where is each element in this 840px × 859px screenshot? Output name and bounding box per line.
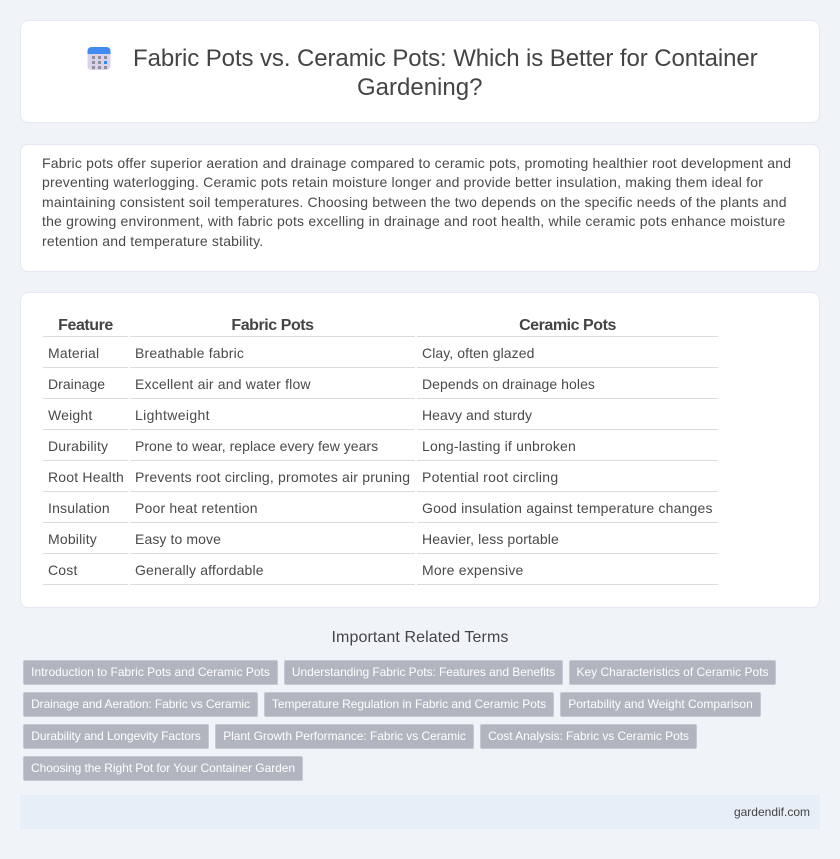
comparison table: Root Health (48, 469, 124, 485)
related terms tags (23, 660, 776, 781)
comparison table: Generally affordable (135, 562, 264, 578)
comparison table: Insulation (48, 500, 110, 516)
comparison table: Long-lasting if unbroken (422, 438, 576, 454)
footer credit: gardendif.com (734, 805, 810, 819)
comparison table: Easy to move (135, 531, 221, 547)
related terms tags: Understanding Fabric Pots: Features and Benefits (292, 665, 555, 679)
related terms tags: Choosing the Right Pot for Your Container Garden (31, 761, 295, 775)
related terms tags: Drainage and Aeration: Fabric vs Ceramic (31, 697, 250, 711)
footer bar (20, 795, 820, 829)
title: Gardening? (357, 74, 482, 101)
related terms tags: Key Characteristics of Ceramic Pots (576, 665, 769, 679)
comparison table: Good insulation against temperature changes (422, 500, 713, 516)
comparison table: Excellent air and water flow (135, 376, 311, 392)
comparison table: Ceramic Pots (519, 317, 616, 334)
related terms tags: Introduction to Fabric Pots and Ceramic Pots (31, 665, 270, 679)
comparison table: Prevents root circling, promotes air pruning (135, 469, 410, 485)
comparison table: Heavy and sturdy (422, 407, 532, 423)
related terms tags: Temperature Regulation in Fabric and Ceramic Pots (272, 697, 546, 711)
header card (20, 20, 820, 123)
intro text: retention and temperature stability. (42, 233, 263, 249)
intro text (42, 154, 791, 249)
comparison table: Durability (48, 438, 108, 454)
intro text: the growing environment, with fabric pots excelling in drainage and root health, while ceramic pots enhance moisture (42, 213, 785, 229)
comparison table: Material (48, 345, 99, 361)
comparison table: More expensive (422, 562, 524, 578)
comparison table: Heavier, less portable (422, 531, 559, 547)
comparison table: Fabric Pots (231, 317, 314, 334)
related terms tags: Durability and Longevity Factors (31, 729, 201, 743)
related terms tags: Plant Growth Performance: Fabric vs Ceramic (223, 729, 466, 743)
comparison table: Weight (48, 407, 92, 423)
related terms tags: Cost Analysis: Fabric vs Ceramic Pots (488, 729, 689, 743)
intro text: Fabric pots offer superior aeration and drainage compared to ceramic pots, promoting healthier root development and (42, 154, 791, 170)
comparison table: Depends on drainage holes (422, 376, 595, 392)
comparison table: Prone to wear, replace every few years (135, 438, 378, 454)
title (133, 45, 758, 101)
related terms heading: Important Related Terms (332, 629, 508, 646)
icon: calendar (88, 47, 110, 70)
related terms tags: Portability and Weight Comparison (568, 697, 753, 711)
title: Fabric Pots vs. Ceramic Pots: Which is Better for Container (133, 45, 758, 72)
intro text: maintaining consistent soil temperatures. Choosing between the two depends on the specific needs of the plants and (42, 194, 787, 210)
comparison table: Feature (58, 317, 113, 334)
comparison table: Breathable fabric (135, 345, 244, 361)
comparison table: Mobility (48, 531, 97, 547)
comparison table card (20, 292, 820, 608)
comparison table: Cost (48, 562, 78, 578)
intro text: preventing waterlogging. Ceramic pots retain moisture longer and provide better insulation, making them ideal for (42, 174, 763, 190)
comparison table (43, 317, 718, 585)
comparison table: Poor heat retention (135, 500, 258, 516)
intro card (20, 144, 820, 272)
comparison table: Potential root circling (422, 469, 558, 485)
comparison table: Lightweight (135, 407, 210, 423)
comparison table: Drainage (48, 376, 105, 392)
comparison table: Clay, often glazed (422, 345, 534, 361)
